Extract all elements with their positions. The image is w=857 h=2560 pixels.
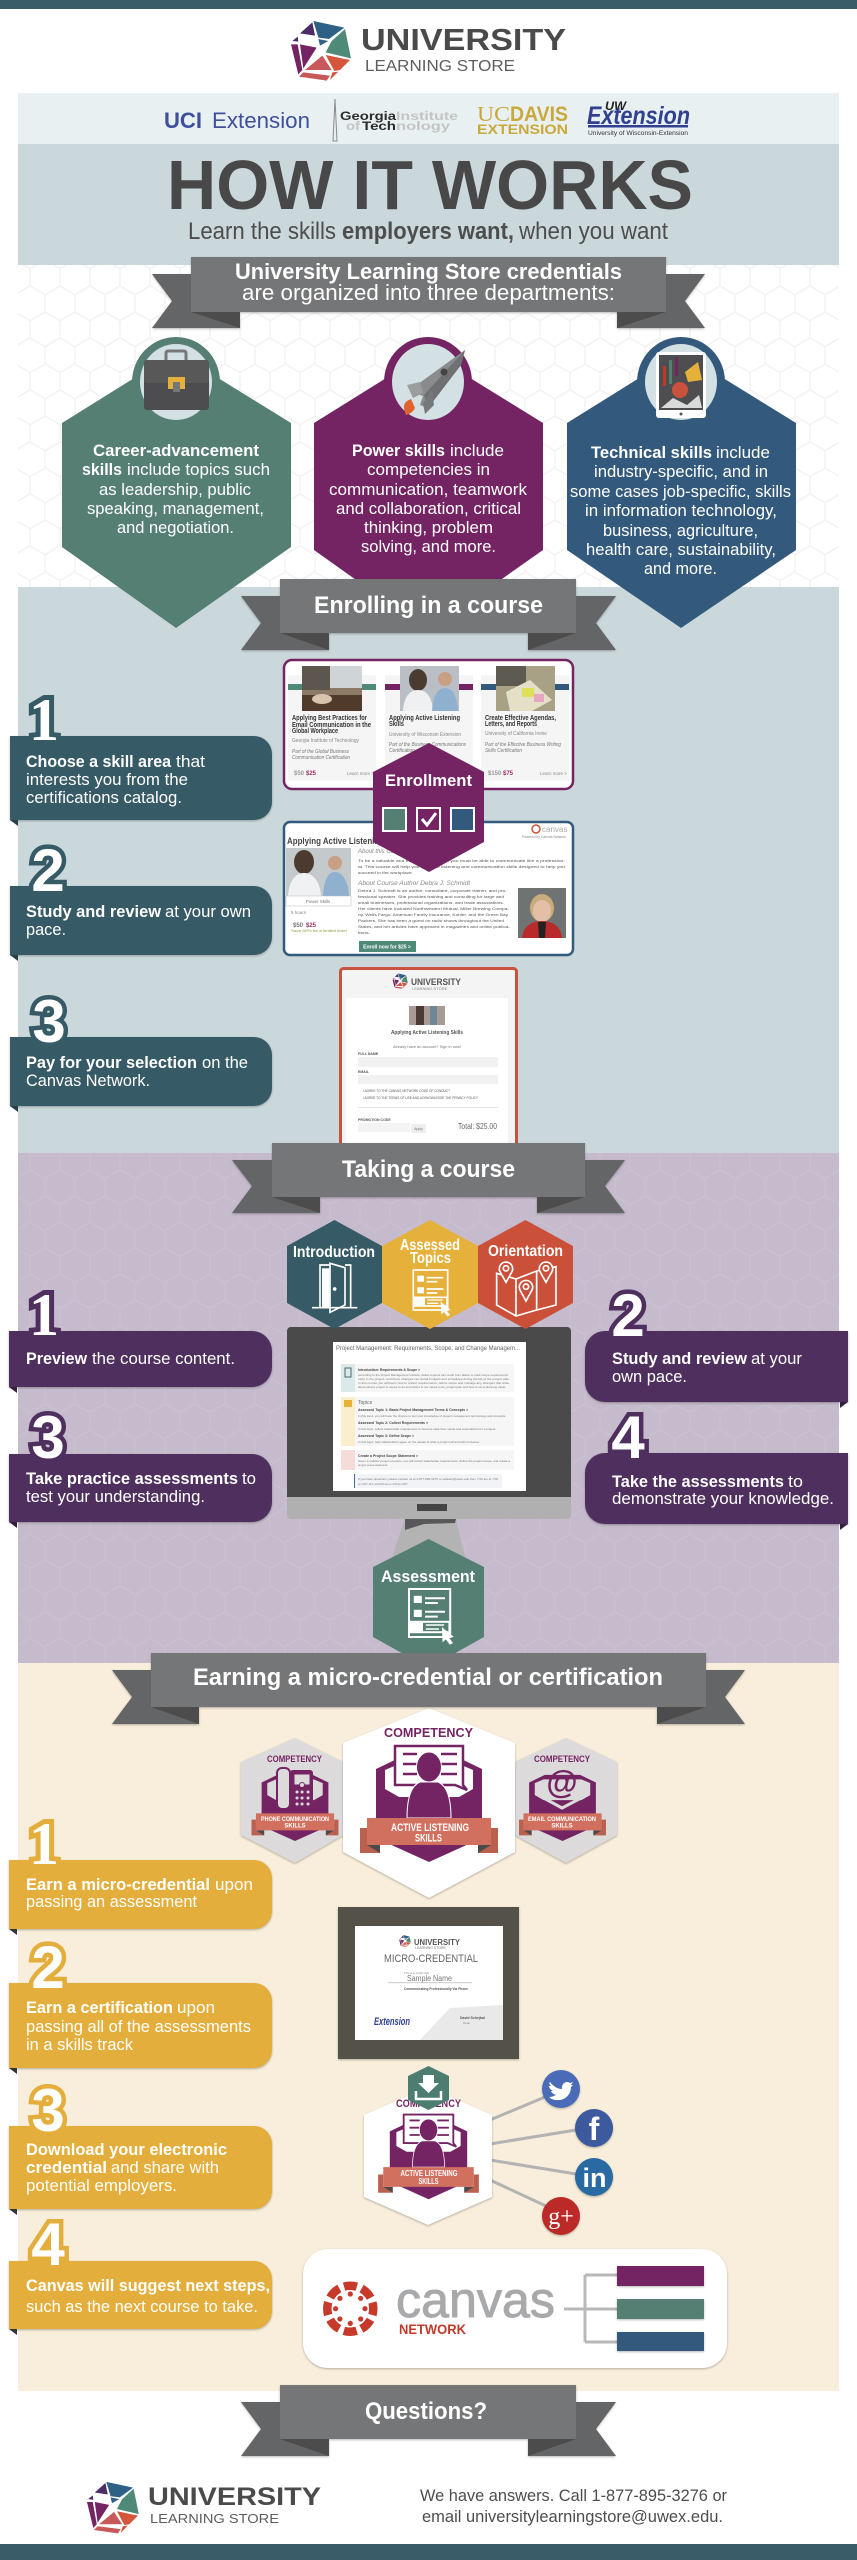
step 2: earn a certification: 2 <box>31 1934 65 2001</box>
logo: UW Extension: Extension <box>587 102 690 130</box>
screenshot: course catalog: Part of the Effective Business Writing <box>485 742 562 748</box>
screenshot: course page: $50 <box>293 923 304 929</box>
step 1: choose a skill area: that <box>176 752 205 771</box>
step 2: study and review <box>10 837 272 961</box>
screenshot: payment form: I AGREE TO THE CANVAS NETWORK CODE OF CONDUCT <box>363 1089 450 1093</box>
ribbon: departments intro: are organized into three departments: <box>242 280 615 305</box>
screenshot: course catalog: Global Workplace <box>292 728 338 735</box>
canvas mini logo <box>522 825 567 839</box>
screenshot: course page: 5 hours <box>291 910 307 915</box>
step 3: pay for your selection: Pay for your selection <box>26 1053 197 1072</box>
screenshot: course page: States, and her articles have appeared in magazines and online publica- <box>358 924 511 929</box>
logo: Georgia Tech: nology <box>396 119 450 133</box>
shareable badge: SKILLS <box>418 2177 439 2186</box>
canvas network panel: canvas <box>396 2272 555 2328</box>
panel text: competencies in <box>367 460 490 479</box>
panel text: skills <box>82 460 122 479</box>
hex: assessment <box>373 1539 484 1668</box>
subtitle: employers want, <box>342 218 514 245</box>
header logo: UNIVERSITY <box>361 22 566 57</box>
ribbon: questions: Questions? <box>365 2398 487 2425</box>
framed micro-credential certificate: Communicating Professionally Via Phone <box>404 1987 468 1991</box>
header logo <box>291 21 566 81</box>
screenshot: course catalog: Certification <box>389 748 415 754</box>
step 2: earn a certification: in a skills track <box>26 2035 133 2054</box>
ribbon: departments intro <box>152 257 705 328</box>
hex: assessed topics: Assessed <box>400 1237 460 1254</box>
competency badge: phone communication: PHONE COMMUNICATION <box>261 1817 329 1823</box>
section background: departments <box>18 265 839 587</box>
icon: door <box>312 1263 357 1312</box>
panel text: industry-specific, and in <box>594 462 768 481</box>
step 3: practice assessments: 3 <box>31 1404 65 1471</box>
competency badge: phone communication: SKILLS <box>284 1824 306 1830</box>
icon: checklist <box>409 1589 454 1645</box>
ribbon: questions <box>241 2385 616 2456</box>
course outline screen: If you have questions, please contact us at 1-877-895-3276 or uwlearn@uwex.edu from 7:00 am to 7:00 <box>358 1477 498 1481</box>
ribbon: taking a course <box>232 1143 625 1213</box>
icon: email: @ <box>546 1764 578 1800</box>
framed micro-credential certificate: Dean <box>463 2021 471 2025</box>
step 3: download credential: credential <box>26 2158 107 2177</box>
icon: download hex <box>408 2066 449 2110</box>
step 3: pay for your selection: Canvas Network. <box>26 1071 150 1090</box>
icon: google plus: g+ <box>548 2204 574 2230</box>
step 3: download credential: and share with <box>111 2158 219 2177</box>
step 4: take the assessments <box>585 1404 848 1530</box>
screenshot: payment form: Applying Active Listening Skills <box>391 1030 463 1036</box>
enrollment hex <box>373 743 484 872</box>
photo: two people talking: Power Skills <box>306 899 331 904</box>
panel text: include <box>450 441 504 460</box>
step 2: earn a certification: passing all of the assessments <box>26 2017 251 2036</box>
step 3: practice assessments: to <box>242 1469 256 1488</box>
step 2: earn a certification <box>9 1934 272 2074</box>
step 4: canvas next steps: 4 <box>31 2211 65 2278</box>
course outline screen: Assessed Topic 3: Define Scope > <box>358 1434 414 1438</box>
course outline screen: In this topic, collect stakeholder requirements to become clear their needs and expectations for a project. <box>358 1427 496 1431</box>
screenshot: payment form: FULL NAME <box>358 1052 379 1056</box>
monitor <box>287 1327 571 1519</box>
logo: UW Extension: University of Wisconsin-Extension <box>588 131 688 137</box>
logo: UC Davis Extension <box>477 102 568 137</box>
screenshot: course catalog <box>284 660 573 789</box>
step 1: earn a micro-credential: passing an assessment <box>26 1892 197 1911</box>
title: HOW IT WORKS <box>167 146 693 224</box>
photo: office desk <box>302 666 362 711</box>
step 1: preview <box>9 1282 272 1393</box>
step 2: study and review: 2 <box>31 837 65 904</box>
competency badge: email communication: EMAIL COMMUNICATION <box>528 1817 596 1823</box>
step 2: study and review: own pace. <box>612 1367 687 1386</box>
course outline screen: Assessed Topic 1: Basic Project Management Terms & Concepts > <box>358 1408 468 1412</box>
step 4: canvas next steps: such as the next course to take. <box>26 2297 258 2316</box>
screenshot: course catalog: Skills Certification <box>485 748 522 754</box>
screenshot: course catalog: University of Wisconsin Extension <box>389 732 461 738</box>
step 1: earn a micro-credential: 1 <box>29 1811 59 1877</box>
partner logo band <box>18 93 839 144</box>
logo: UC Davis Extension: DAVIS <box>510 103 568 126</box>
course outline screen: Project Management: Requirements, Scope, and Change Managem... <box>336 1345 520 1352</box>
icon: linkedin: in <box>582 2163 606 2193</box>
competency badge: active listening: ACTIVE LISTENING <box>391 1822 469 1834</box>
screenshot: course catalog: Applying Active Listening <box>389 715 460 722</box>
screenshot: course catalog: Part of the Business Communications <box>389 742 466 748</box>
screenshot: course page: ny, Wells Fargo, American Family Insurance, Kohler, and the Green Bay <box>358 912 508 917</box>
screenshot: course page: Packers. She has been a guest on radio shows throughout the United <box>358 918 504 923</box>
mini logo: UNIVERSITY <box>411 977 461 987</box>
logo: Georgia Tech: Tech <box>362 119 396 133</box>
connector <box>564 2275 617 2342</box>
logo: UC Davis Extension: UC <box>477 102 510 126</box>
course outline screen <box>333 1342 526 1491</box>
step 1: choose a skill area: 1 <box>29 687 59 753</box>
step 3: practice assessments <box>9 1404 272 1528</box>
panel text: business, agriculture, <box>603 521 758 540</box>
panel text: health care, sustainability, <box>586 540 776 559</box>
step 3: practice assessments: Take practice assessments <box>26 1469 238 1488</box>
icon: linkedin <box>575 2158 613 2196</box>
footer logo <box>87 2482 321 2533</box>
course outline screen: about what a project is meant to do and what it is not meant to do, project plan and how to set a planning value. <box>358 1385 506 1389</box>
course outline screen: Given a realistic project scenario, you will collect stakeholder requirements, define the project scope, and create a <box>358 1459 510 1463</box>
panel text: Career-advancement <box>93 441 259 460</box>
framed micro-credential certificate: MICRO-CREDENTIAL <box>384 1953 478 1965</box>
panel text: and more. <box>644 559 717 578</box>
screenshot: course catalog: Create Effective Agendas, <box>485 715 556 722</box>
panel text: Technical skills <box>591 443 712 462</box>
photo: two people talking <box>400 666 459 711</box>
course outline screen: Introduction: Requirements & Scope > <box>358 1368 420 1372</box>
footer logo: LEARNING STORE <box>150 2511 279 2526</box>
screenshot: payment form: Total: $25.00 <box>458 1122 497 1131</box>
screenshot: course page: Debra J. Schmidt is an author, consultant, corporate trainer, and pro- <box>358 888 508 893</box>
title panel <box>18 144 839 265</box>
logo: UW Extension <box>587 99 690 137</box>
icon: google plus <box>542 2197 580 2235</box>
icon: rocket <box>384 337 472 427</box>
competency badge: phone communication <box>241 1738 343 1863</box>
logo: Georgia Tech: of <box>346 119 361 133</box>
panel text: solving, and more. <box>361 537 496 556</box>
icon: checklist <box>413 1270 451 1316</box>
logo: UW Extension: UW <box>605 99 628 113</box>
panel text: include topics such <box>127 460 270 479</box>
step 4: take the assessments: demonstrate your knowledge. <box>612 1489 834 1508</box>
screenshot: course catalog: $25 <box>306 771 317 777</box>
ribbon: enrolling in a course <box>241 579 616 650</box>
panel: technical skills <box>567 337 796 628</box>
framed micro-credential certificate: UNIVERSITY <box>414 1938 461 1947</box>
top bar <box>0 0 857 9</box>
step 4: canvas next steps <box>9 2211 275 2335</box>
connector lines to social icons <box>490 2097 576 2206</box>
photo: course author <box>518 888 566 938</box>
icon: phone <box>277 1768 313 1810</box>
logo: UCI Extension: Extension <box>212 108 310 133</box>
enroll button <box>359 941 416 952</box>
course outline screen: Create a Project Scope Statement > <box>358 1454 418 1458</box>
icon: twitter <box>542 2070 580 2108</box>
framed micro-credential certificate: Extension <box>374 2016 410 2028</box>
canvas logo mark <box>327 2286 373 2332</box>
step 2: earn a certification: Earn a certification <box>26 1998 173 2017</box>
course outline screen: pm CDT, M-F, and 8:00 am to 4:00 pm CDT. <box>358 1482 408 1486</box>
ribbon: taking a course: Taking a course <box>342 1156 515 1183</box>
screenshot: payment form: Apply <box>414 1127 423 1131</box>
canvas network panel <box>303 2249 727 2368</box>
step 3: download credential: potential employers. <box>26 2176 177 2195</box>
screenshot: course page: al. This course will help you build the listening and communication skills designed to help you <box>358 864 565 869</box>
step 1: choose a skill area: certifications catalog. <box>26 788 182 807</box>
canvas mini logo: canvas <box>542 825 567 834</box>
shareable badge: ACTIVE LISTENING <box>400 2169 458 2178</box>
hex: introduction <box>287 1220 382 1329</box>
step 2: earn a certification: upon <box>177 1998 215 2017</box>
screenshot: course page: small businesses, professional organizations, and trade associations. <box>358 900 504 905</box>
hex: assessed topics <box>382 1220 478 1329</box>
icon: facebook: f <box>589 2111 600 2147</box>
header logo: LEARNING STORE <box>365 58 515 75</box>
panel text: thinking, problem <box>364 518 493 537</box>
screenshot: course catalog: Learn more > <box>540 771 567 776</box>
step 2: study and review: at your own <box>165 902 251 921</box>
icon: briefcase <box>132 337 220 427</box>
step 2: study and review: Study and review <box>26 902 162 921</box>
step 1: earn a micro-credential: Earn a micro-credential <box>26 1875 210 1894</box>
screenshot: payment form: I AGREE TO THE TERMS OF USE AND ACKNOWLEDGE THE PRIVACY POLICY <box>363 1096 479 1100</box>
course outline screen: early in the project, and these changes can derail budgets and schedules during the life of the project plan. <box>358 1377 510 1381</box>
panel text: some cases job-specific, skills <box>570 482 791 501</box>
mini logo <box>393 974 461 991</box>
panel text: communication, teamwork <box>329 480 527 499</box>
screenshot: course page: $25 <box>306 923 317 929</box>
competency badge: active listening <box>343 1708 515 1898</box>
competency badge: email communication: COMPETENCY <box>534 1754 591 1765</box>
step 4: take the assessments: 4 <box>611 1404 645 1471</box>
screenshot: course catalog: Learn more > <box>347 771 374 776</box>
panel text: include <box>716 443 770 462</box>
icon: facebook <box>575 2109 613 2147</box>
framed micro-credential certificate <box>338 1907 519 2059</box>
step 4: take the assessments: Take the assessments <box>612 1472 784 1491</box>
ribbon: enrolling in a course: Enrolling in a course <box>314 592 543 619</box>
step 3: pay for your selection: on the <box>202 1053 248 1072</box>
department bars <box>617 2266 704 2351</box>
hex: assessed topics: Topics <box>410 1250 451 1267</box>
panel text: and negotiation. <box>117 518 234 537</box>
competency badge: phone communication: COMPETENCY <box>267 1754 323 1765</box>
competency badge: active listening: COMPETENCY <box>384 1725 473 1740</box>
course outline screen: Assessed Topic 2: Collect Requirements > <box>358 1421 428 1425</box>
step 1: preview: Preview <box>26 1349 88 1368</box>
section background: enrolling <box>18 587 839 1153</box>
screenshot: course page: fessional speaker. She provides training and consulting for large and <box>358 894 504 899</box>
logo: UC Davis Extension: EXTENSION <box>477 121 568 137</box>
logo: Georgia Tech: Institute <box>396 109 458 123</box>
step 1: earn a micro-credential: upon <box>215 1875 253 1894</box>
subtitle: when you want <box>518 218 668 245</box>
screenshot: payment form: EMAIL <box>358 1070 370 1074</box>
ribbon: earning a micro-credential or certification: Earning a micro-credential or certification <box>193 1664 663 1691</box>
screenshot: course page: About this Course <box>357 849 406 855</box>
screenshot: course catalog: Georgia Institute of Technology <box>292 738 359 744</box>
step 1: choose a skill area <box>10 687 272 826</box>
hex: orientation: Orientation <box>488 1243 563 1260</box>
course outline screen: In this course you will learn how to collect requirements, define scope and manage any changes that arise. <box>358 1381 510 1385</box>
screenshot: course page: Save 50% for a limited time! <box>291 929 347 933</box>
course outline screen: In this topic, you will have the chance to test your knowledge of project management terminology and concepts. <box>358 1414 506 1418</box>
hex: assessment: Assessment <box>381 1567 475 1586</box>
logo: Georgia Tech: Georgia <box>340 109 396 123</box>
framed micro-credential certificate: Sample Name <box>407 1974 452 1983</box>
step 3: pay for your selection <box>10 988 272 1112</box>
enrollment hex: Enrollment <box>385 771 472 790</box>
panel text: in information technology, <box>585 501 777 520</box>
screenshot: course catalog: $150 <box>488 771 502 777</box>
bottom bar <box>0 2544 857 2560</box>
step 1: choose a skill area: Choose a skill area <box>26 752 172 771</box>
screenshot: course catalog: University of California Irvine <box>485 731 547 737</box>
course outline screen: Topics <box>358 1400 373 1406</box>
screenshot: course catalog: Part of the Global Business <box>292 749 349 755</box>
panel: career-advancement skills <box>62 337 291 628</box>
canvas network panel: NETWORK <box>399 2321 466 2337</box>
icon: map <box>497 1262 556 1316</box>
screenshot: course page <box>284 822 573 955</box>
subtitle: Learn the skills <box>188 218 336 245</box>
section background: earning <box>18 1663 839 2391</box>
monitor stand <box>390 1519 468 1565</box>
footer logo: UNIVERSITY <box>148 2483 321 2511</box>
screenshot: payment form <box>340 968 516 1158</box>
ribbon: earning a micro-credential or certification <box>112 1653 745 1724</box>
course outline screen: According to the Project Management Institute, failed projects can result from failure to track scope requirements <box>358 1373 508 1377</box>
panel text: and collaboration, critical <box>336 499 521 518</box>
step 3: practice assessments: test your understanding. <box>26 1487 205 1506</box>
shareable badge <box>364 2087 492 2225</box>
hex: introduction: Introduction <box>293 1244 375 1261</box>
competency badge: active listening: SKILLS <box>415 1832 442 1844</box>
logo: Georgia Tech <box>333 99 458 141</box>
section background: taking a course <box>18 1153 839 1663</box>
competency badge: email communication <box>515 1738 617 1863</box>
canvas mini logo: Powered by Canvas Network <box>522 835 566 839</box>
step 4: take the assessments: to <box>788 1472 803 1491</box>
course outline screen: project scope statement. <box>358 1463 388 1467</box>
course outline screen: In this topic, help stakeholders agree on the details of what a project will and will not deliver. <box>358 1440 480 1444</box>
step 3: download credential: 3 <box>31 2077 65 2144</box>
screenshot: payment form: Already have an account? Sign in now! <box>393 1044 461 1049</box>
framed micro-credential certificate: LEARNING STORE <box>415 1946 447 1950</box>
screenshot: course page: About Course Author Debra J. Schmidt <box>357 881 470 887</box>
step 1: earn a micro-credential <box>9 1811 272 1935</box>
framed micro-credential certificate: This is to certify that <box>404 1971 429 1975</box>
icon: tablet <box>637 337 725 427</box>
step 3: pay for your selection: 3 <box>32 988 66 1055</box>
screenshot: course page: Her clients have included Northwestern Mutual, Miller Brewing Compa- <box>358 906 510 911</box>
enroll button: Enroll now for $25 > <box>363 944 411 950</box>
screenshot: course catalog: Letters, and Reports <box>485 721 537 728</box>
step 3: download credential <box>9 2077 272 2215</box>
screenshot: course catalog: Email Communication in the <box>292 722 371 729</box>
screenshot: payment form: PROMOTION CODE <box>358 1118 391 1122</box>
step 1: preview: 1 <box>29 1282 59 1348</box>
step 1: preview: the course content. <box>92 1349 235 1368</box>
screenshot: course page: tions. <box>358 930 370 935</box>
step 2: study and review: Study and review <box>612 1349 748 1368</box>
screenshot: course catalog: Applying Best Practices for <box>292 715 367 722</box>
contact text: We have answers. Call 1-877-895-3276 or <box>420 2486 727 2505</box>
panel text: Power skills <box>352 441 445 460</box>
screenshot: course catalog: Skills <box>389 721 404 728</box>
step 2: study and review: pace. <box>26 920 66 939</box>
contact text: email universitylearningstore@uwex.edu. <box>422 2507 723 2526</box>
mini logo: LEARNING STORE <box>412 986 448 991</box>
step 1: choose a skill area: interests you from the <box>26 770 188 789</box>
screenshot: course catalog: $75 <box>503 771 514 777</box>
panel text: speaking, management, <box>87 499 264 518</box>
step 4: canvas next steps: Canvas will suggest next steps, <box>26 2276 270 2295</box>
step 2: study and review <box>585 1282 848 1408</box>
screenshot: course catalog: $50 <box>294 771 305 777</box>
step 2: study and review: at your <box>751 1349 802 1368</box>
screenshot: course catalog: Communication Certification <box>292 755 350 761</box>
screenshot: course page: To be a valuable and effective employee, you must be able to communicate like a profession- <box>358 858 566 863</box>
framed micro-credential certificate: David Schejbal <box>460 2016 485 2020</box>
panel: power skills <box>314 337 543 631</box>
panel text: as leadership, public <box>99 480 251 499</box>
screenshot: course page: Applying Active Listening Skills <box>287 836 407 847</box>
step 3: download credential: Download your electronic <box>26 2140 227 2159</box>
shareable badge: COMPETENCY <box>396 2098 462 2110</box>
step 2: study and review: 2 <box>611 1282 645 1349</box>
photo: two people talking <box>286 848 351 906</box>
screenshot: course page: succeed in the workplace. <box>358 870 413 875</box>
hex: orientation <box>478 1220 573 1329</box>
photo: sticky notes <box>496 666 555 711</box>
competency badge: email communication: SKILLS <box>551 1824 573 1830</box>
ribbon: departments intro: University Learning Store credentials <box>235 259 622 284</box>
logo: UCI Extension: UCI <box>164 108 202 133</box>
